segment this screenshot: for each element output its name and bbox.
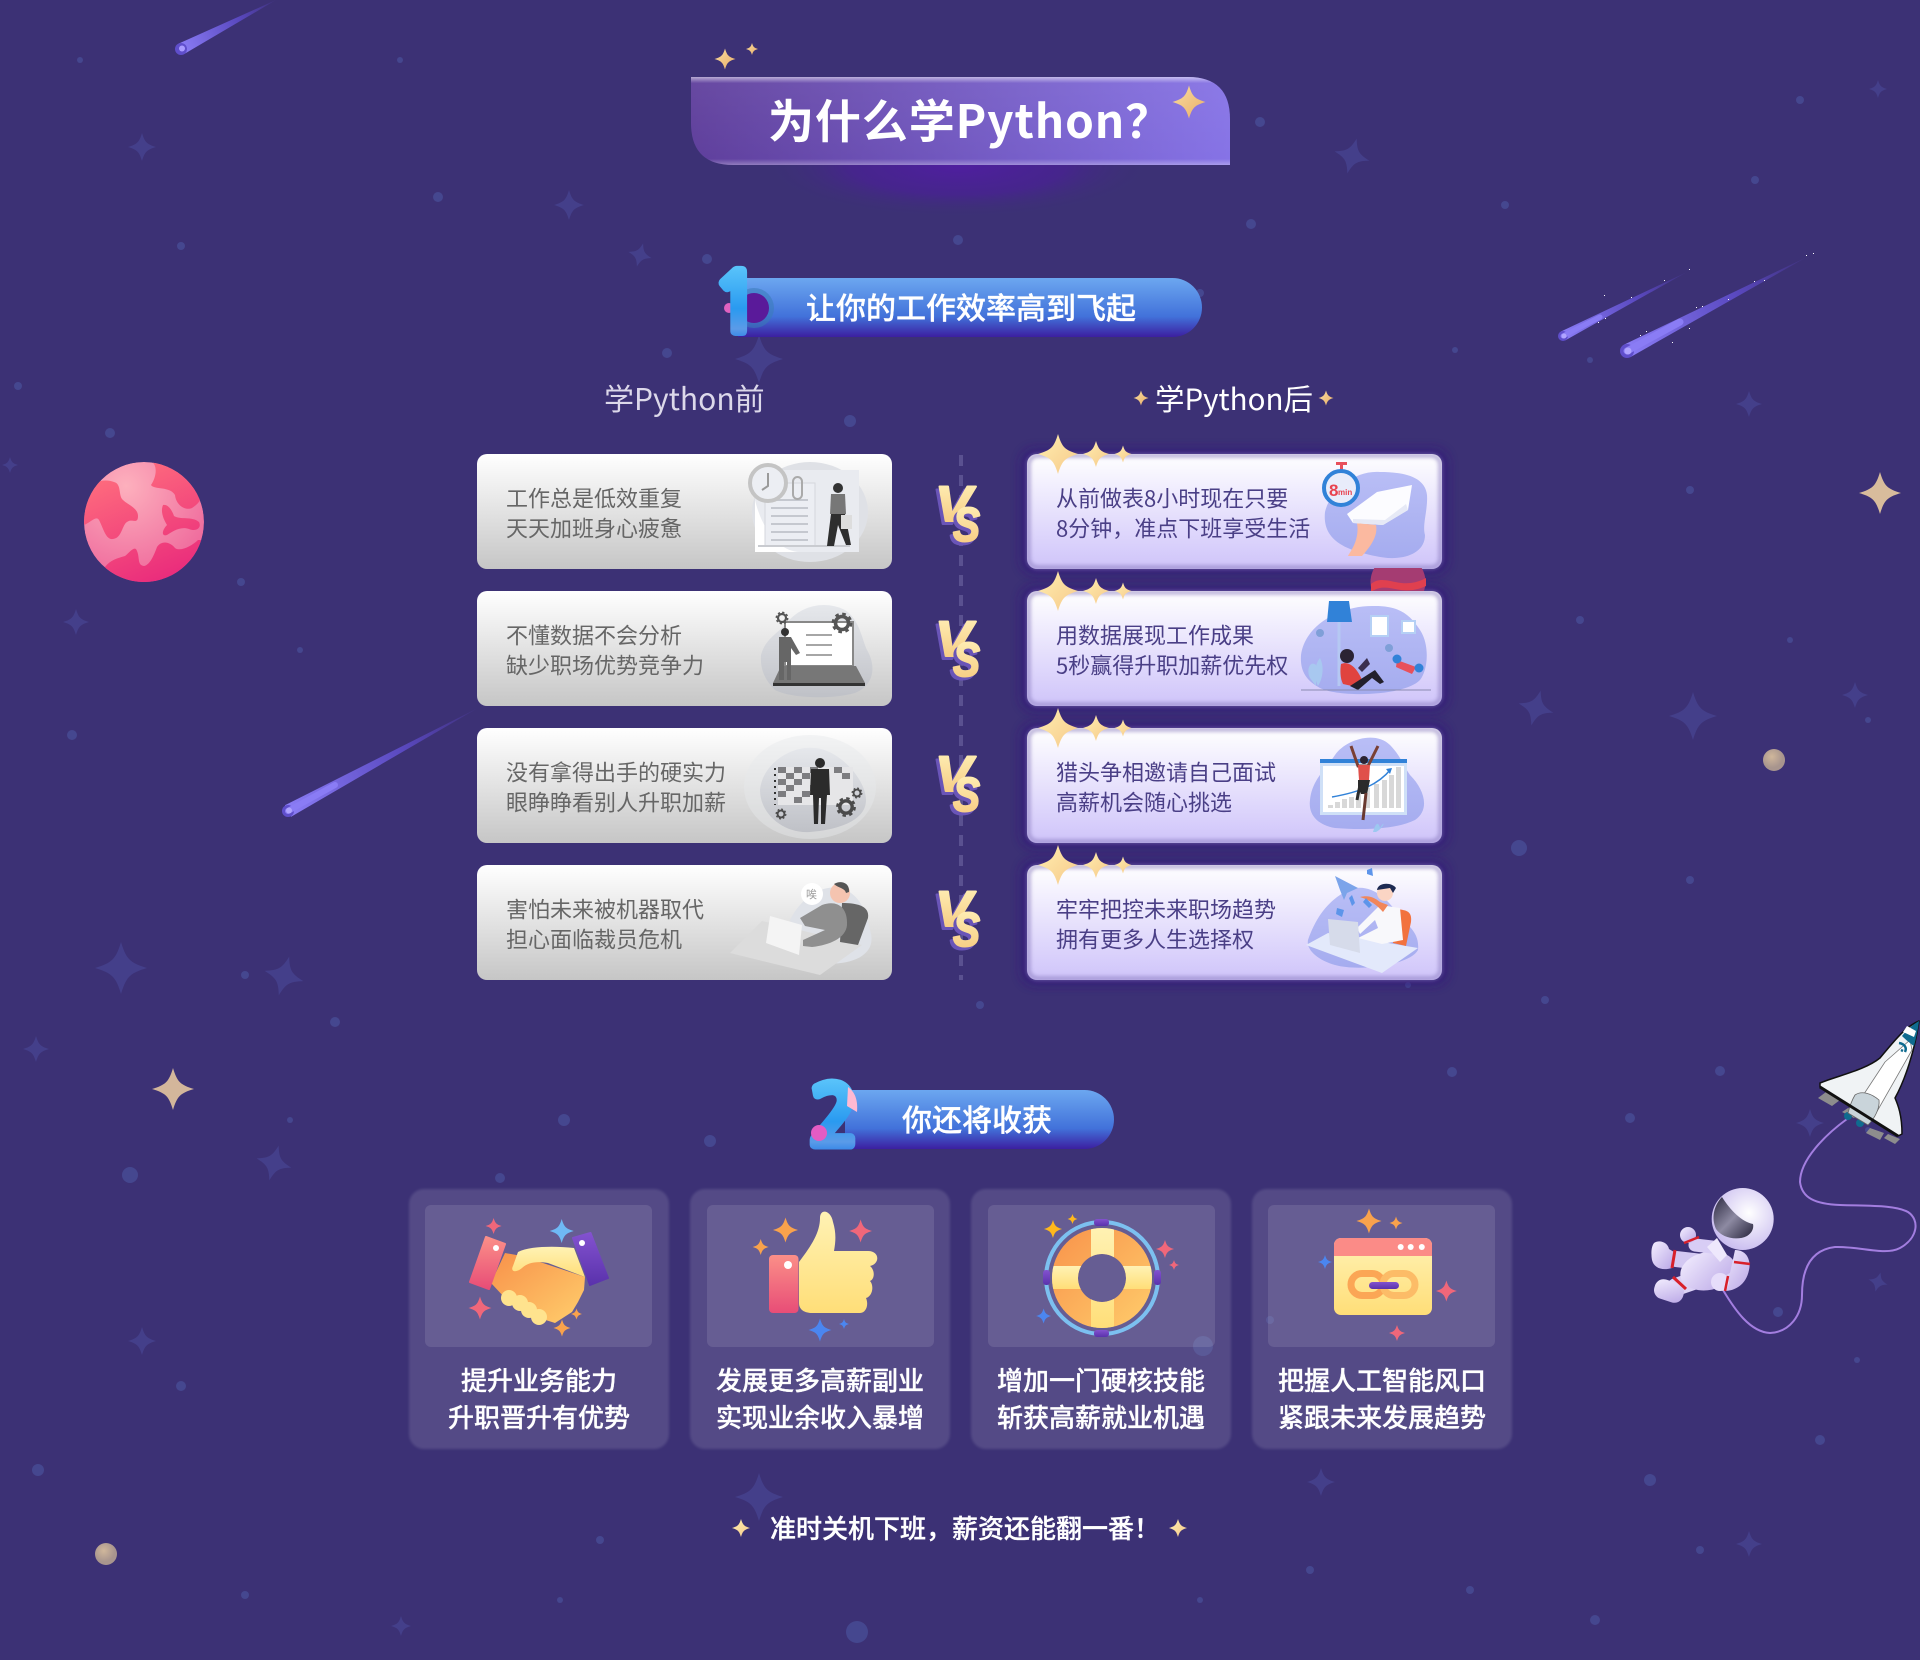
illustration: runner and chart [1310,738,1424,832]
number 2: 2 [809,1077,859,1158]
chest plate [1707,1238,1727,1262]
panel: benefit 2: 实现业余收入暴增 [716,1398,924,1435]
section 2 heading [809,1077,1114,1158]
panel: benefit 2 [690,1189,950,1449]
title banner [691,77,1230,165]
illustration: sighing person at laptop: 唉 [806,886,817,902]
panel: after card 4 [1021,845,1448,985]
panel: benefit 4: 紧跟未来发展趋势 [1278,1398,1486,1435]
panel: after card 2: 用数据展现工作成果 [1056,618,1254,650]
illustration: stopwatch and papers [1324,462,1427,558]
section 2 title text: 你还将收获 [902,1096,1052,1140]
illustration: sighing person at laptop [730,882,872,975]
footer slogan: 准时关机下班，薪资还能翻一番！ [770,1509,1160,1546]
illustration: laptop [761,605,872,697]
panel: benefit 4: 把握人工智能风口 [1278,1361,1486,1398]
astronaut [1651,1188,1774,1305]
icon: thumbs up [753,1212,877,1342]
illustration: stopwatch and papers: 8 [1329,481,1338,500]
section 1 title text: 让你的工作效率高到飞起 [806,284,1136,328]
section 1 heading [712,264,1202,345]
illustration: man with paper plane [1306,868,1418,973]
panel: before card 3 [477,728,892,843]
panel: after card 4: 牢牢把控未来职场趋势 [1056,892,1276,924]
vs 1 [935,476,980,552]
panel: before card 1 [477,454,892,569]
illustration: reading person [1301,601,1431,694]
title glow [816,165,1101,204]
illustration: person and checker wall [744,735,876,839]
panel: after card 4: 拥有更多人生选择权 [1056,922,1254,954]
illustration: clock and document [750,462,868,562]
column heading: before: 学Python前 [604,375,765,419]
panel: before card 1: 天天加班身心疲惫 [506,512,682,544]
panel: benefit 1: 提升业务能力 [461,1361,617,1398]
helmet [1712,1188,1774,1250]
panel: before card 3: 眼睁睁看别人升职加薪 [506,786,726,818]
panel: before card 4: 害怕未来被机器取代 [506,892,704,924]
column heading: after: 学Python后 [1155,377,1313,419]
icon: browser window with link [1318,1208,1457,1341]
visor [1714,1197,1753,1238]
panel: after card 1: 8分钟，准点下班享受生活 [1056,512,1310,544]
panel: after card 1: 从前做表8小时现在只要 [1056,482,1288,514]
icon: handshake [468,1218,608,1336]
panel: before card 4 [477,865,892,980]
icon: lifebuoy [1036,1214,1179,1337]
vs 2 [935,611,980,687]
panel: benefit 1 [409,1189,669,1449]
panel: before card 2 [477,591,892,706]
panel: before card 2: 缺少职场优势竞争力 [506,648,704,680]
panel: before card 2: 不懂数据不会分析 [506,618,682,650]
gold stars and dots decor [95,472,1901,1565]
title stars [714,43,758,70]
divider dashed [959,455,963,980]
panel: before card 1: 工作总是低效重复 [506,482,682,514]
lower leg and boot [1652,1277,1702,1305]
number 1: 1 [712,264,762,345]
panel: benefit 1: 升职晋升有优势 [448,1398,630,1435]
meteors [175,0,1814,817]
upper leg and boot [1651,1241,1702,1269]
panel: after card 3: 猎头争相邀请自己面试 [1056,756,1276,788]
panel: after card 1 [1021,434,1448,574]
panel: after card 2: 5秒赢得升职加薪优先权 [1056,648,1288,680]
torso [1677,1247,1739,1295]
vs 3 [935,746,980,822]
side arm [1711,1250,1750,1291]
panel: benefit 4 [1252,1189,1512,1449]
panel: after card 2 [1021,571,1448,711]
pink planet [84,462,204,590]
panel: before card 3: 没有拿得出手的硬实力 [506,756,726,788]
panel: before card 4: 担心面临裁员危机 [506,922,682,954]
raised arm [1680,1227,1712,1247]
panel: benefit 3: 增加一门硬核技能 [997,1361,1205,1398]
panel: benefit 2: 发展更多高薪副业 [716,1361,924,1398]
tether [1723,1119,1916,1333]
panel: after card 3 [1021,708,1448,848]
title text: 为什么学Python？ [768,86,1172,152]
panel: benefit 3 [971,1189,1231,1449]
vs 4 [935,881,980,957]
red planet between cards [1370,568,1426,591]
panel: after card 3: 高薪机会随心挑选 [1056,786,1232,818]
illustration: stopwatch and papers: min [1338,488,1352,497]
panel: benefit 3: 斩获高薪就业机遇 [997,1398,1205,1435]
space shuttle [1818,1021,1919,1144]
